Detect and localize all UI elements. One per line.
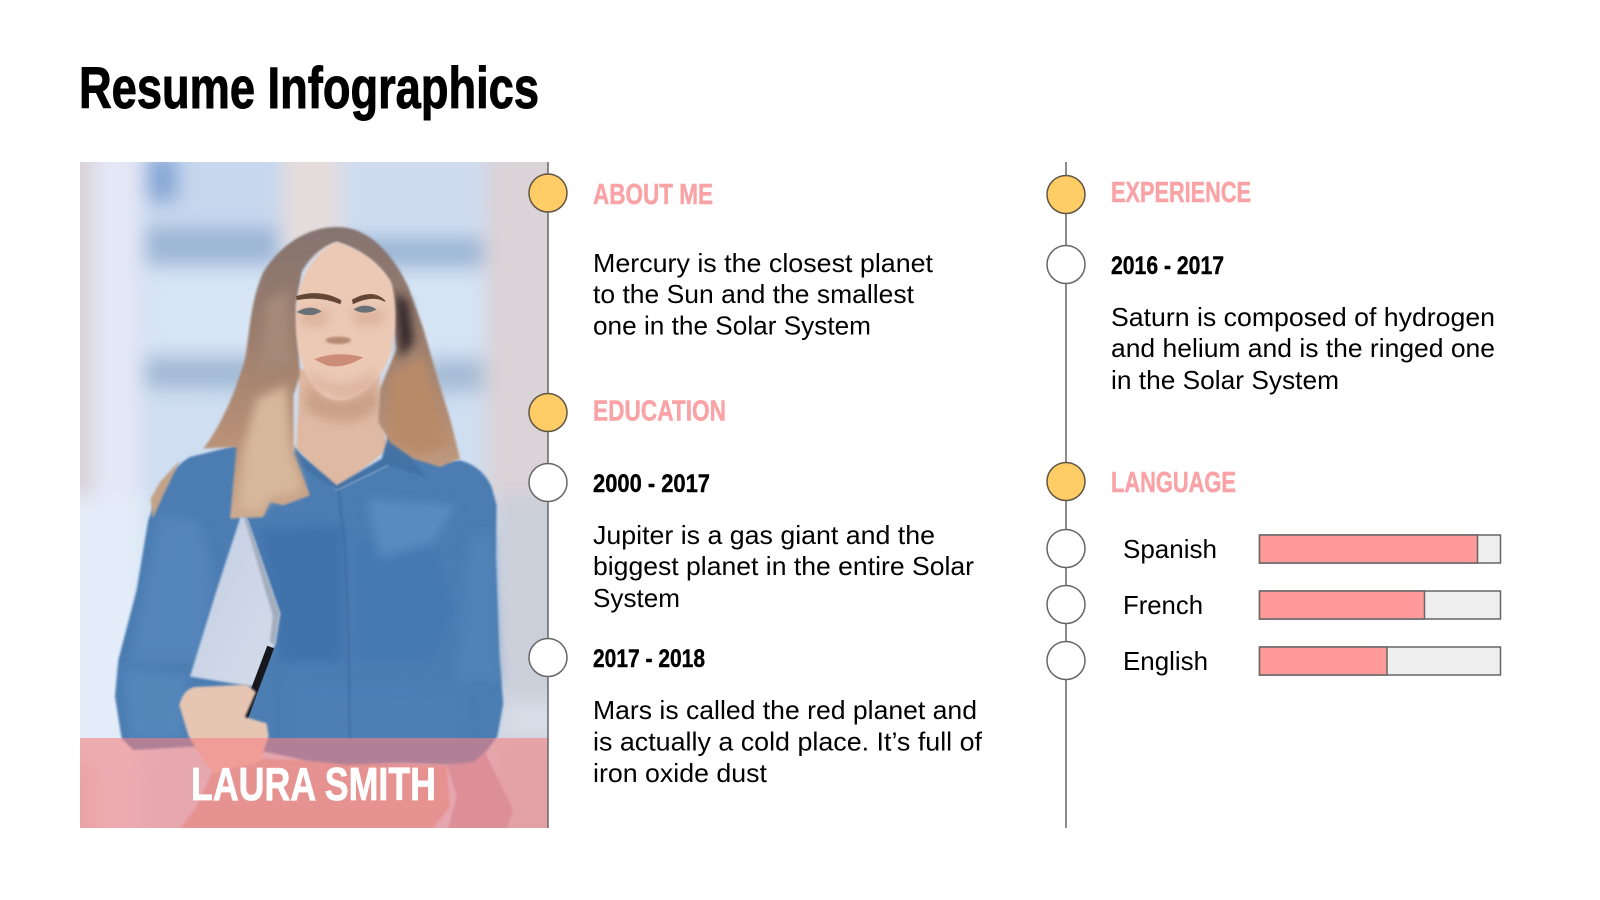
title: Resume Infographics (79, 56, 539, 121)
marker: spanish (1047, 530, 1085, 568)
text: jupiter: Jupiter is a gas giant and the (593, 520, 935, 550)
text: mars: is actually a cold place. It’s full of (593, 726, 983, 756)
right timeline (1047, 162, 1085, 828)
marker: 2017-2018 (529, 638, 567, 676)
text: jupiter (593, 520, 974, 613)
text: saturn: Saturn is composed of hydrogen (1111, 302, 1495, 332)
shirt (115, 445, 503, 765)
text: jupiter: System (593, 583, 680, 613)
date: 2017-2018: 2017 - 2018 (593, 645, 705, 673)
face (296, 242, 395, 400)
name band: Laura Smith (80, 738, 548, 828)
section: about me (593, 179, 934, 340)
left timeline (529, 162, 567, 828)
text: about me (593, 248, 934, 340)
marker: english (1047, 642, 1085, 680)
marker: 2000-2017 (529, 464, 567, 502)
text: mars (593, 695, 983, 788)
text: about me: to the Sun and the smallest (593, 279, 915, 309)
text: saturn: and helium and is the ringed one (1111, 333, 1495, 363)
bar: french (1260, 591, 1500, 619)
text: mars: iron oxide dust (593, 758, 768, 788)
date: 2016-2017: 2016 - 2017 (1111, 252, 1224, 280)
text: jupiter: biggest planet in the entire Solar (593, 551, 974, 581)
neck (297, 369, 388, 490)
label: french: French (1123, 590, 1203, 620)
photo: woman holding a laptop (80, 162, 548, 828)
laptop (190, 517, 280, 687)
text: saturn: in the Solar System (1111, 365, 1339, 395)
text: about me: Mercury is the closest planet (593, 248, 934, 278)
label: spanish: Spanish (1123, 534, 1217, 564)
text: saturn (1111, 302, 1495, 395)
heading: about me: ABOUT ME (593, 179, 713, 211)
collar (293, 435, 427, 490)
label: english: English (1123, 646, 1208, 676)
placket seam (338, 490, 350, 739)
marker: about me (529, 174, 567, 212)
text: about me: one in the Solar System (593, 310, 871, 340)
shirt shading (123, 499, 500, 752)
section: experience (1111, 177, 1495, 395)
marker: french (1047, 586, 1085, 624)
section: education (593, 396, 983, 788)
bar: english (1260, 647, 1500, 675)
hair highlights (238, 289, 447, 512)
text: mars: Mars is called the red planet and (593, 695, 977, 725)
hand (179, 685, 269, 773)
bar: spanish (1260, 535, 1500, 563)
section: language (1111, 467, 1500, 676)
date: 2000-2017: 2000 - 2017 (593, 470, 710, 498)
pants (180, 759, 450, 829)
marker: education (529, 394, 567, 432)
marker: language (1047, 462, 1085, 500)
heading: experience: EXPERIENCE (1111, 177, 1251, 209)
name band: Laura Smith: LAURA SMITH (191, 758, 436, 810)
heading: education: EDUCATION (593, 396, 726, 428)
marker: experience (1047, 176, 1085, 214)
right cuff (447, 752, 513, 829)
marker: 2016-2017 (1047, 246, 1085, 284)
heading: language: LANGUAGE (1111, 467, 1236, 499)
hair back and sides (203, 227, 460, 519)
